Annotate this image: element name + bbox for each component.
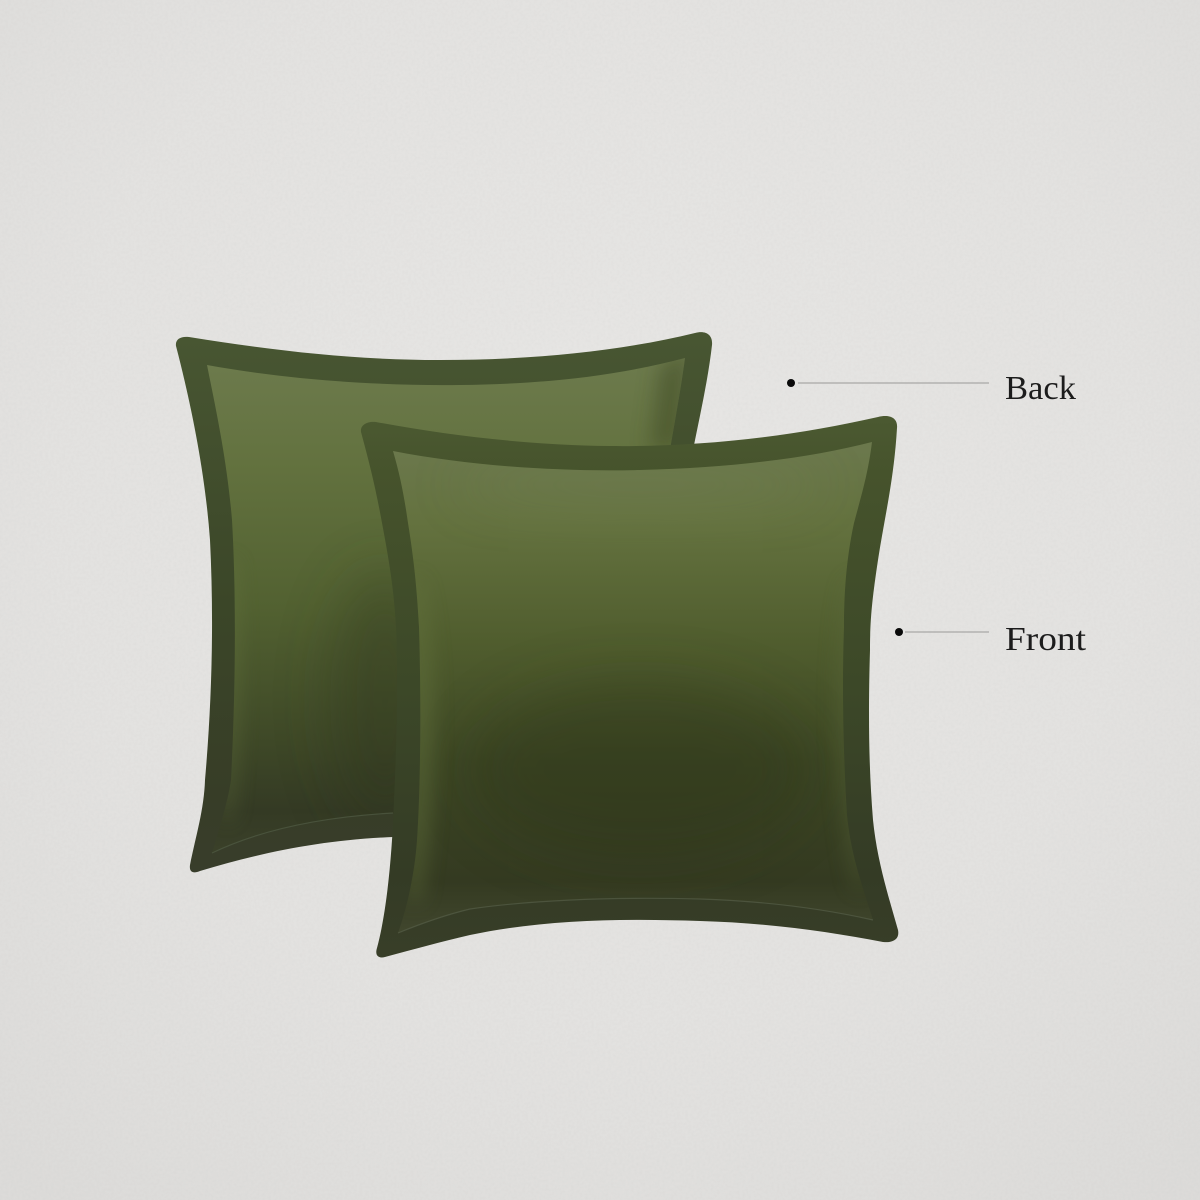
dot bbox=[895, 628, 903, 636]
back pillow body bbox=[207, 358, 685, 804]
back pillow bbox=[176, 332, 712, 872]
leader line bbox=[905, 631, 989, 633]
callout: Back bbox=[787, 370, 1076, 407]
left side sheen bbox=[410, 637, 436, 896]
top highlight bbox=[450, 469, 830, 501]
leader line bbox=[798, 382, 989, 384]
front pillow flange bbox=[361, 416, 898, 957]
dot bbox=[787, 379, 795, 387]
callout: Front bbox=[895, 621, 1087, 658]
front pillow seam bbox=[398, 898, 873, 933]
label: Back bbox=[1005, 370, 1076, 407]
front pillow bbox=[361, 416, 898, 957]
back pillow flange bbox=[176, 332, 712, 872]
back pillow seam bbox=[212, 813, 393, 853]
center shading bbox=[520, 692, 772, 756]
shading bbox=[336, 578, 397, 744]
left side sheen bbox=[225, 680, 238, 810]
front pillow body bbox=[385, 440, 880, 945]
right side sheen bbox=[841, 734, 857, 870]
label: Front bbox=[1005, 621, 1087, 658]
